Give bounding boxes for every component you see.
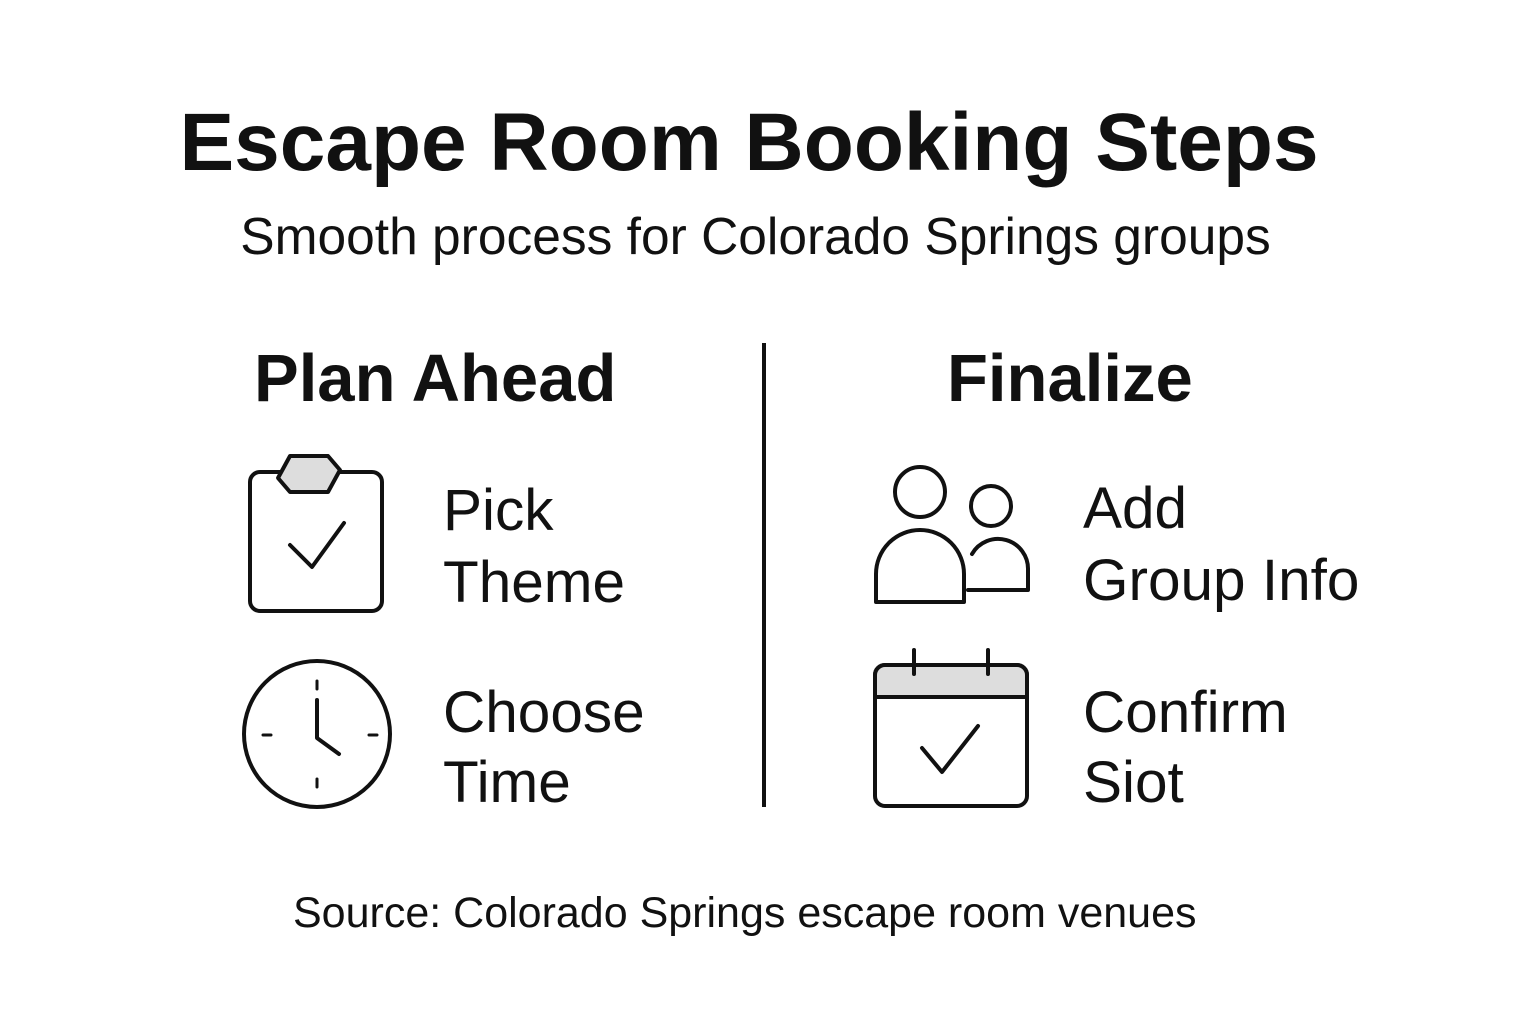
- text: Add Group Info: Group Info: [1083, 548, 1359, 613]
- text: Pick Theme: [443, 478, 625, 615]
- icon: clock: [244, 661, 390, 807]
- text: Pick Theme: Theme: [443, 550, 625, 615]
- divider: [762, 343, 766, 807]
- heading: Finalize: Finalize: [947, 341, 1193, 416]
- title: Escape Room Booking Steps: [179, 97, 1319, 188]
- text: Choose Time: Time: [443, 750, 571, 815]
- subtitle: Smooth process for Colorado Springs groups: [240, 207, 1271, 265]
- text: Confirm Siot: Confirm: [1083, 680, 1288, 745]
- source: Source: Colorado Springs escape room venues: [293, 889, 1197, 937]
- text: Pick Theme: Pick: [443, 478, 554, 543]
- icon: clipboard: [250, 456, 382, 611]
- icon: people: [876, 467, 1028, 602]
- text: Confirm Siot: [1083, 680, 1288, 815]
- text: Add Group Info: Add: [1083, 476, 1187, 541]
- icon: calendar: [875, 650, 1027, 806]
- text: Choose Time: Choose: [443, 680, 645, 745]
- text: Choose Time: [443, 680, 645, 815]
- text: Confirm Siot: Siot: [1083, 750, 1184, 815]
- text: Add Group Info: [1083, 476, 1359, 613]
- heading: Plan Ahead: Plan Ahead: [254, 341, 616, 416]
